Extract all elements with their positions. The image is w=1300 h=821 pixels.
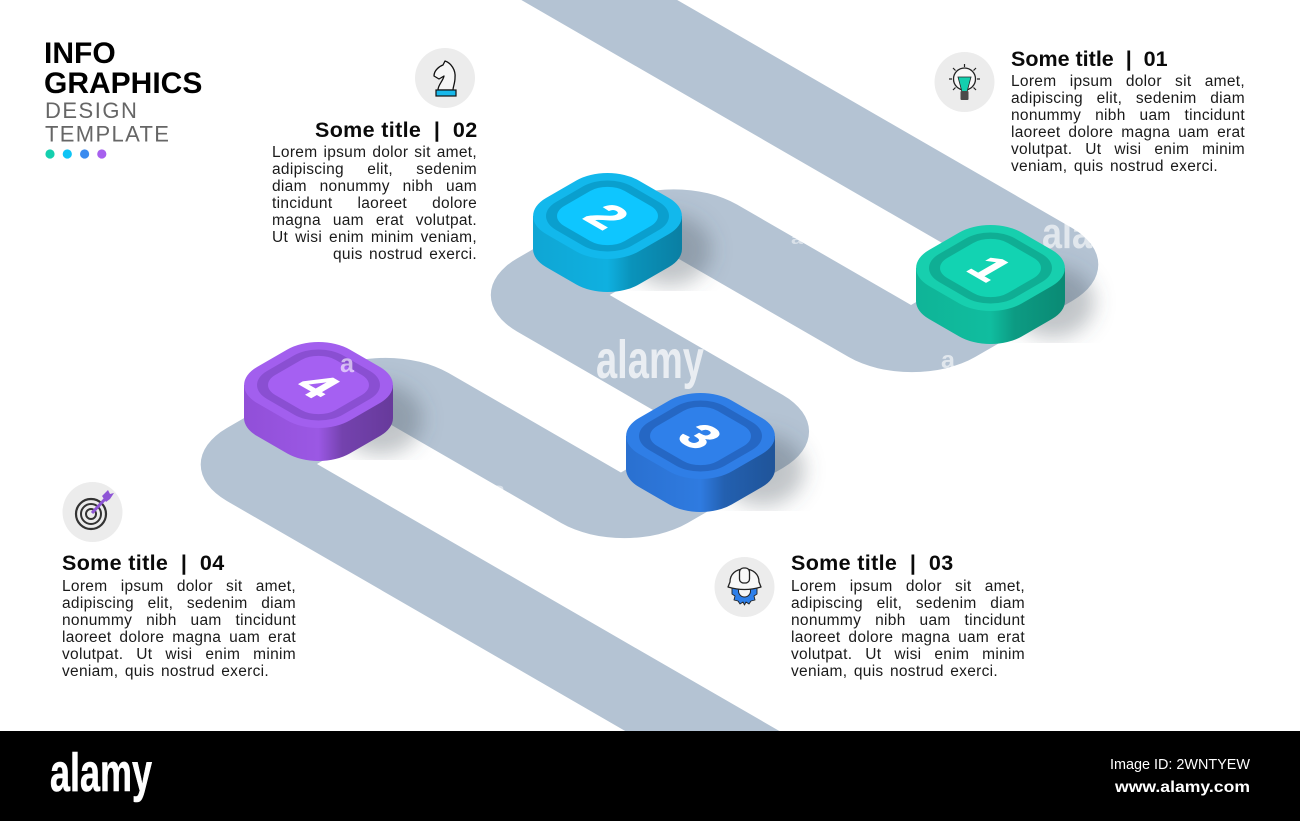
text block 02: quis nostrud exerci. xyxy=(333,246,477,263)
watermark: road fragment lower: a xyxy=(491,481,505,498)
text block 01: nonummy nibh uam tincidunt xyxy=(1011,107,1245,124)
text block 02: Ut wisi enim minim veniam, xyxy=(272,229,477,246)
step 4 top face xyxy=(226,332,411,438)
text block 04: veniam, quis nostrud exerci. xyxy=(62,663,269,680)
step 1 top face xyxy=(898,214,1083,322)
website: www.alamy.com xyxy=(1114,779,1250,796)
step 4 side xyxy=(244,385,393,461)
footer bar xyxy=(0,731,1300,821)
step 2 top face xyxy=(515,162,700,270)
icon: helmet and gear xyxy=(714,557,774,617)
step 3 number: 3 xyxy=(666,416,734,456)
text block 04: nonummy nibh uam tincidunt xyxy=(62,612,296,629)
text block 02: tincidunt laoreet dolore xyxy=(272,195,477,212)
icon: target xyxy=(62,482,122,542)
icon: knight xyxy=(415,48,475,108)
text block 01: laoreet dolore magna uam erat xyxy=(1011,124,1245,141)
text block 03: veniam, quis nostrud exerci. xyxy=(791,663,998,680)
heading: DESIGN xyxy=(45,98,138,123)
legend dots xyxy=(45,149,106,159)
heading: INFO xyxy=(44,37,116,70)
watermark: road fragment upper: a xyxy=(791,231,803,248)
step 3 top face xyxy=(608,382,793,490)
step 3 side xyxy=(626,436,775,512)
text block 04 xyxy=(62,578,296,680)
text block 03: Lorem ipsum dolor sit amet, xyxy=(791,578,1025,594)
step 1 side xyxy=(916,268,1065,344)
text block 04: Lorem ipsum dolor sit amet, xyxy=(62,578,296,594)
watermark: block 4 fragment: a xyxy=(340,348,355,378)
title 02: Some title | 02 xyxy=(315,118,478,142)
text block 01: adipiscing elit, sedenim diam xyxy=(1011,90,1245,107)
image id: Image ID: 2WNTYEW xyxy=(1110,756,1251,773)
step 3 shadow xyxy=(720,434,804,506)
text block 03: nonummy nibh uam tincidunt xyxy=(791,612,1025,629)
heading: TEMPLATE xyxy=(45,122,170,146)
text block 02: adipiscing elit, sedenim xyxy=(272,161,477,178)
heading xyxy=(44,37,202,146)
text block 01: volutpat. Ut wisi enim minim xyxy=(1011,141,1245,158)
step 1 number: 1 xyxy=(956,248,1024,288)
watermark: upper right fragment: ala xyxy=(1042,209,1092,258)
text block 02 xyxy=(272,144,477,263)
text block 03: adipiscing elit, sedenim diam xyxy=(791,595,1025,612)
text block 03: volutpat. Ut wisi enim minim xyxy=(791,646,1025,663)
text block 04: volutpat. Ut wisi enim minim xyxy=(62,646,296,663)
text block 02: Lorem ipsum dolor sit amet, xyxy=(272,144,477,160)
text block 01 xyxy=(1011,73,1245,175)
step 2 block xyxy=(533,173,718,292)
step 4 shadow xyxy=(338,383,422,455)
step 2 side xyxy=(533,216,682,292)
text block 02: diam nonummy nibh uam xyxy=(272,178,477,195)
text block 01: veniam, quis nostrud exerci. xyxy=(1011,158,1218,175)
footer logo: alamy xyxy=(50,743,152,803)
text block 02: magna uam erat volutpat. xyxy=(272,212,477,229)
text block 03 xyxy=(791,578,1025,680)
step 1 shadow xyxy=(1010,266,1094,338)
heading: GRAPHICS xyxy=(44,67,202,100)
step 4 block xyxy=(244,342,429,461)
icon: light bulb xyxy=(934,52,994,112)
title 03: Some title | 03 xyxy=(791,551,954,575)
step 2 shadow xyxy=(628,214,712,286)
text block 04: adipiscing elit, sedenim diam xyxy=(62,595,296,612)
step 1 block xyxy=(916,225,1104,344)
step 3 block xyxy=(626,393,814,512)
text block 01: Lorem ipsum dolor sit amet, xyxy=(1011,73,1245,90)
text block 03: laoreet dolore magna uam erat xyxy=(791,629,1025,646)
title 04: Some title | 04 xyxy=(62,551,225,575)
title 01: Some title | 01 xyxy=(1011,47,1168,71)
step 4 number: 4 xyxy=(284,365,352,405)
text block 04: laoreet dolore magna uam erat xyxy=(62,629,296,646)
step 2 number: 2 xyxy=(573,196,641,236)
watermark: road fragment: a xyxy=(941,347,956,374)
watermark: centre: alamy xyxy=(596,330,704,390)
